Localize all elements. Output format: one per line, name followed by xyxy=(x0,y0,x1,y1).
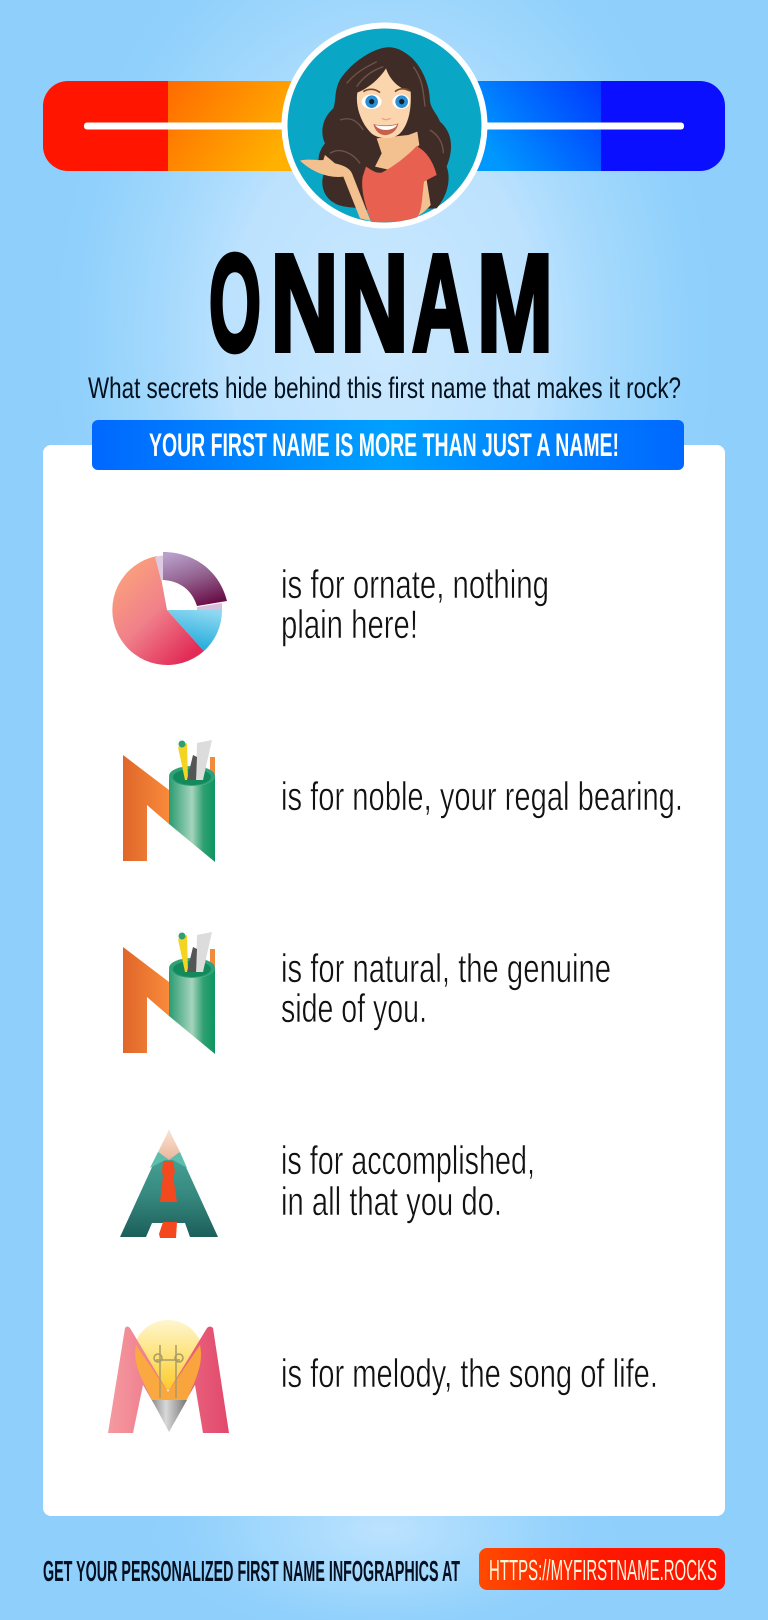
text: second N line xyxy=(281,947,611,1031)
text: second N line: is for natural, the genuine xyxy=(281,947,611,991)
text: O line xyxy=(281,563,549,647)
title: O xyxy=(209,226,261,380)
arm with hand xyxy=(300,155,371,221)
banner xyxy=(92,420,684,470)
title: A xyxy=(412,226,469,380)
avatar: woman illustration in circle xyxy=(282,22,488,228)
icon: A with tie xyxy=(120,1130,218,1238)
right arm xyxy=(417,180,431,217)
face xyxy=(357,68,411,138)
text: second N line: side of you. xyxy=(281,987,427,1031)
header colour bar xyxy=(43,81,725,171)
shirt xyxy=(362,146,437,222)
icon: second N with pencil cup xyxy=(123,932,215,1054)
icon: M with light bulb xyxy=(108,1320,229,1433)
title: N xyxy=(340,226,408,380)
hair xyxy=(319,47,451,210)
icon: N with pencil cup xyxy=(123,740,215,862)
mouth xyxy=(373,123,398,135)
title: M xyxy=(477,226,553,380)
white content panel xyxy=(43,445,725,1516)
text: A line: in all that you do. xyxy=(281,1180,502,1224)
footer link button xyxy=(479,1548,725,1590)
text: A line xyxy=(281,1139,535,1224)
title: N xyxy=(270,226,338,380)
text: A line: is for accomplished, xyxy=(281,1139,535,1183)
icon: O pie chart xyxy=(112,552,227,665)
text: O line: plain here! xyxy=(281,603,418,647)
text: O line: is for ornate, nothing xyxy=(281,563,549,607)
brows and eyes xyxy=(363,89,409,93)
neck xyxy=(375,132,419,170)
